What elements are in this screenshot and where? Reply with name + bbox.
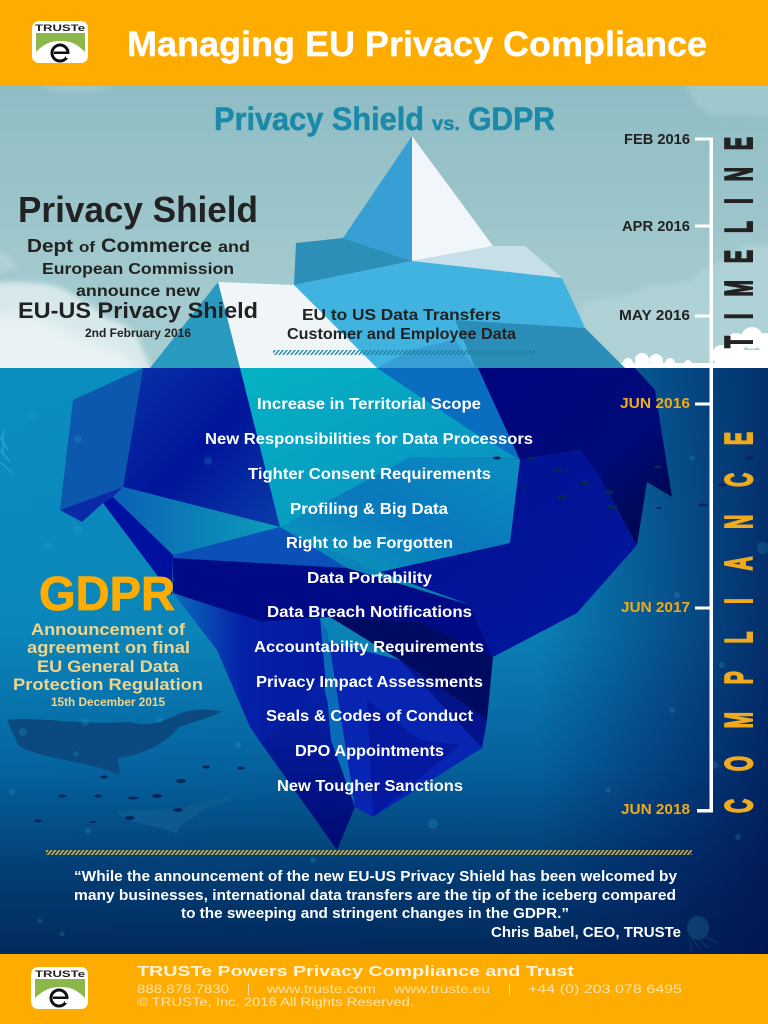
logo: TRUSTe footer — [31, 967, 88, 1009]
footer text: © TRUSTe, Inc. 2016 All Rights Reserved. — [137, 997, 414, 1009]
list: GDPR requirements: Accountability Requirements — [254, 639, 484, 656]
list: GDPR requirements: Seals & Codes of Conduct — [266, 708, 473, 725]
footer text: | — [247, 984, 250, 996]
background: water — [0, 368, 768, 954]
text block: GDPR: GDPR — [39, 568, 175, 621]
timeline dates: JUN 2016 — [620, 396, 690, 412]
timeline dates: JUN 2018 — [621, 802, 690, 818]
logo: TRUSTe footer: TRUSTe — [35, 969, 85, 980]
footer text — [137, 963, 682, 1009]
quote: “While the announcement of the new EU-US Privacy Shield has been welcomed by — [74, 869, 677, 885]
list: GDPR requirements: New Tougher Sanctions — [277, 778, 463, 795]
footer text: TRUSTe Powers Privacy Compliance and Trust — [137, 963, 574, 980]
timeline dates: MAY 2016 — [619, 308, 690, 324]
text block: GDPR: agreement on final — [27, 639, 190, 657]
timeline dates: JUN 2017 — [621, 600, 690, 616]
list: GDPR requirements: Tighter Consent Requirements — [248, 466, 491, 483]
footer band — [0, 954, 768, 1024]
text block: Privacy Shield — [18, 189, 258, 340]
text block: GDPR — [13, 568, 203, 709]
timeline dates: FEB 2016 — [624, 132, 690, 148]
title: Managing EU Privacy Compliance — [127, 25, 707, 64]
text block: Privacy Shield: EU-US Privacy Shield — [18, 298, 258, 323]
heading: Privacy Shield vs. GDPR: GDPR — [468, 101, 555, 137]
text block: Privacy Shield: European Commission — [42, 261, 234, 278]
list: GDPR requirements — [205, 396, 533, 795]
text block: Privacy Shield: Commerce — [101, 236, 212, 257]
heading: Privacy Shield vs. GDPR — [214, 101, 555, 137]
vertical label: TIMELINE: TIMELINE — [717, 137, 761, 348]
list: GDPR requirements: Right to be Forgotten — [286, 535, 453, 552]
timeline dates — [619, 132, 690, 818]
clouds — [0, 70, 768, 400]
list: GDPR requirements: Increase in Territorial Scope — [257, 396, 481, 413]
text block: EU to US data transfers — [287, 307, 516, 343]
text block: GDPR: Protection Regulation — [13, 676, 203, 694]
text block: Privacy Shield: 2nd February 2016 — [85, 328, 191, 340]
background: sky — [0, 86, 768, 368]
quote: to the sweeping and stringent changes in the GDPR.” — [181, 906, 569, 922]
list: GDPR requirements: Data Breach Notifications — [267, 604, 472, 621]
heading: Privacy Shield vs. GDPR: Privacy Shield — [214, 101, 424, 137]
list: GDPR requirements: New Responsibilities for Data Processors — [205, 431, 533, 448]
text block: Privacy Shield: Privacy Shield — [18, 189, 258, 230]
logo: TRUSTe header — [32, 21, 88, 63]
logo: TRUSTe header: TRUSTe — [35, 23, 85, 34]
header band — [0, 0, 768, 86]
text block: GDPR: 15th December 2015 — [51, 697, 166, 709]
list: GDPR requirements: DPO Appointments — [295, 743, 444, 760]
timeline dates: APR 2016 — [622, 219, 690, 235]
vertical label: COMPLIANCE: COMPLIANCE — [717, 432, 761, 813]
text block: Privacy Shield: of — [79, 239, 96, 256]
fish and bubbles — [9, 412, 768, 936]
iceberg below water — [60, 368, 672, 850]
quote — [74, 869, 681, 941]
quote: Chris Babel, CEO, TRUSTe — [491, 925, 681, 941]
text block: EU to US data transfers: Customer and Employee Data — [287, 326, 516, 343]
jellyfish and sea creature — [0, 430, 718, 952]
footer text: www.truste.eu — [393, 984, 490, 996]
iceberg above water — [150, 136, 625, 368]
text block: Privacy Shield: and — [218, 239, 250, 256]
whales — [7, 710, 240, 835]
list: GDPR requirements: Data Portability — [307, 570, 432, 587]
footer text: www.truste.com — [266, 984, 376, 996]
footer text: | — [508, 984, 511, 996]
list: GDPR requirements: Privacy Impact Assessments — [256, 674, 483, 691]
text block: Privacy Shield: Dept — [27, 236, 73, 256]
quote: many businesses, international data transfers are the tip of the iceberg compared — [74, 888, 676, 904]
text block: GDPR: Announcement of — [31, 621, 186, 639]
footer text: 888.878.7830 — [137, 984, 229, 996]
text block: GDPR: EU General Data — [37, 658, 180, 676]
timeline axis — [695, 138, 713, 812]
text block: Privacy Shield: announce new — [76, 283, 201, 300]
list: GDPR requirements: Profiling & Big Data — [290, 501, 448, 518]
text block: EU to US data transfers: EU to US Data Transfers — [302, 307, 501, 324]
footer text: +44 (0) 203 078 6495 — [528, 984, 682, 996]
heading: Privacy Shield vs. GDPR: vs. — [432, 114, 460, 135]
